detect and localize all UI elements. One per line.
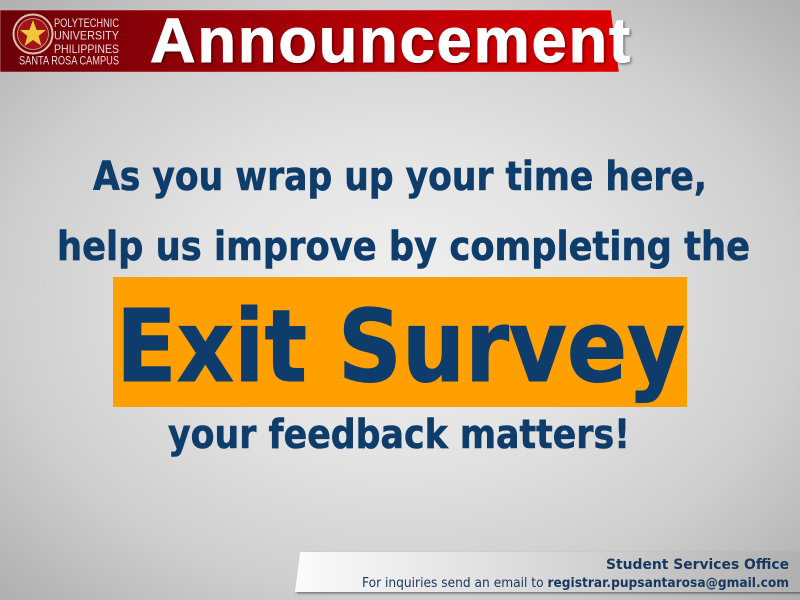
banner title: Announcement [150,6,630,76]
campus name: POLYTECHNIC [54,16,119,30]
campus name: PHILIPPINES [54,42,119,56]
headline line 1: As you wrap up your time here, [93,154,707,200]
campus name: UNIVERSITY [54,28,119,42]
header banner [0,6,630,76]
footer ribbon [295,552,800,592]
footer panel [295,552,800,592]
campus name [19,16,119,68]
contact line: For inquiries send an email to registrar.pupsantarosa@gmail.com [362,576,789,591]
banner ribbon [0,10,619,72]
icon: university seal [14,14,52,54]
office name: Student Services Office [606,557,789,573]
campus name: SANTA ROSA CAMPUS [19,54,119,68]
highlighted callout: exit survey: Exit Survey [116,288,685,405]
closing line: your feedback matters! [168,412,630,458]
